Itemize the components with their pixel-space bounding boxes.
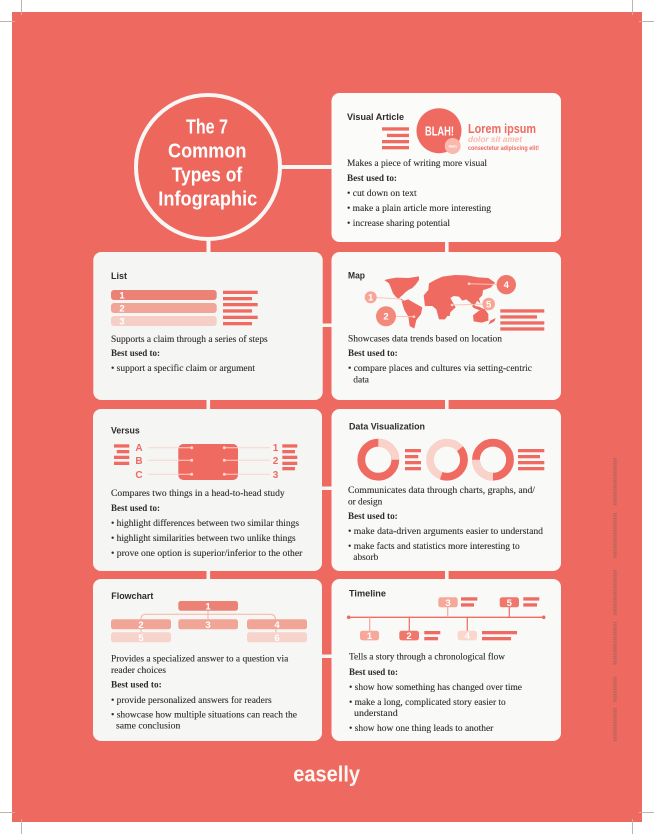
body text: flowchart: same conclusion	[116, 721, 180, 732]
title circle: Infographic	[158, 187, 257, 210]
numbered bars	[111, 290, 217, 328]
comparison diagram: 3	[273, 470, 279, 481]
body text: versus: • highlight similarities between two unlike things	[111, 533, 296, 544]
body text: visual article: • increase sharing potential	[347, 218, 450, 229]
body text: data visualization: absorb	[353, 552, 378, 563]
timeline diagram: 3	[445, 598, 451, 609]
icon: text lines	[223, 291, 258, 325]
connector lines	[206, 165, 449, 658]
body text: visual article: Makes a piece of writing more visual	[347, 158, 487, 169]
flow diagram: 1	[205, 601, 211, 612]
comparison diagram: 1	[273, 443, 279, 454]
body text: timeline: • make a long, complicated story easier to	[349, 697, 506, 708]
body text: data visualization: • make facts and statistics more interesting to	[348, 541, 520, 552]
body text: data visualization	[348, 485, 543, 563]
body text: timeline: Best used to:	[349, 667, 398, 678]
body text: data visualization: Communicates data through charts, graphs, and/	[348, 485, 535, 496]
body text: versus	[111, 488, 303, 559]
map callouts	[365, 275, 516, 326]
timeline diagram: 4	[465, 631, 471, 642]
panel: visual article	[332, 93, 561, 242]
body text: visual article: • make a plain article more interesting	[347, 203, 491, 214]
heading: flowchart: Flowchart	[111, 591, 154, 602]
flow diagram: 6	[274, 633, 280, 644]
timeline diagram: 5	[507, 598, 513, 609]
heading: timeline: Timeline	[349, 588, 386, 599]
body text: visual article	[347, 158, 491, 229]
icon: right text lines	[282, 444, 297, 470]
body text: timeline: Tells a story through a chronological flow	[349, 652, 506, 663]
body text: map: Best used to:	[348, 348, 398, 359]
numbered bars: 3	[119, 316, 125, 328]
donut chart 2	[430, 443, 464, 477]
icon: text lines	[382, 127, 409, 149]
body text: timeline	[349, 652, 523, 734]
illegible vertical credit line	[613, 458, 617, 742]
comparison diagram: C	[135, 470, 143, 481]
body text: versus: Compares two things in a head-to-head study	[111, 488, 285, 499]
title circle: Types of	[172, 164, 242, 187]
icon: text lines	[500, 309, 544, 331]
title circle: Common	[168, 139, 246, 162]
comparison diagram: A	[135, 443, 143, 454]
panel: list	[93, 252, 323, 400]
sample lorem text	[468, 122, 539, 152]
body text: map	[348, 334, 533, 386]
body text: flowchart: • showcase how multiple situations can reach the	[111, 710, 298, 721]
body text: versus: Best used to:	[111, 503, 160, 514]
body text: versus: • prove one option is superior/inferior to the other	[111, 548, 303, 559]
heading: visual article: Visual Article	[347, 112, 404, 123]
body text: data visualization: • make data-driven arguments easier to understand	[348, 526, 543, 537]
body text: flowchart	[111, 654, 298, 732]
numbered bars: 2	[119, 304, 125, 314]
comparison diagram: 2	[273, 456, 279, 467]
sample lorem text: Lorem ipsum	[468, 122, 536, 136]
flow diagram	[111, 601, 307, 644]
timeline diagram: 2	[406, 631, 412, 642]
comparison diagram: B	[135, 456, 143, 467]
comparison diagram	[135, 443, 279, 481]
body text: flowchart: reader choices	[111, 665, 166, 676]
map callouts: 2	[383, 312, 389, 323]
icon: left text lines	[114, 444, 129, 465]
body text: timeline: • show how something has changed over time	[349, 682, 523, 693]
timeline diagram	[347, 597, 546, 642]
body text: list: • support a specific claim or argument	[111, 363, 255, 374]
timeline diagram: 1	[367, 631, 373, 642]
panel: flowchart	[93, 579, 322, 741]
icon: right text lines	[518, 449, 544, 470]
easelly logo: easelly	[293, 762, 361, 787]
panel: timeline	[332, 579, 561, 741]
heading: list: List	[111, 271, 128, 282]
title circle: The 7	[186, 115, 228, 138]
map callouts: 4	[504, 280, 510, 291]
body text: map: • compare places and cultures via setting-centric	[348, 363, 533, 374]
icon: blah bubble: BLAH!	[425, 123, 454, 138]
map callouts: 1	[368, 293, 374, 304]
body text: list	[111, 334, 268, 374]
numbered bars: 1	[119, 290, 125, 302]
sample lorem text: consectetur adipiscing elit!	[468, 145, 539, 152]
body text: versus: • highlight differences between two similar things	[111, 518, 299, 529]
heading: versus: Versus	[111, 426, 140, 437]
panel: versus	[93, 409, 322, 571]
body text: list: Best used to:	[111, 348, 160, 359]
body text: visual article: • cut down on text	[347, 188, 417, 199]
body text: map: data	[353, 375, 370, 386]
icon: blah bubble: blah	[449, 144, 457, 148]
icon: middle text lines	[405, 449, 421, 470]
body text: flowchart: • provide personalized answers for readers	[111, 695, 272, 706]
body text: map: Showcases data trends based on location	[348, 334, 502, 345]
donut chart 1	[361, 443, 395, 477]
body text: list: Supports a claim through a series of steps	[111, 334, 268, 345]
body text: flowchart: Provides a specialized answer to a question via	[111, 654, 289, 665]
flow diagram: 3	[205, 620, 211, 631]
panel: data visualization	[332, 409, 561, 571]
title circle	[136, 95, 280, 239]
heading: data visualization: Data Visualization	[349, 422, 425, 433]
body text: timeline: understand	[354, 708, 398, 719]
body text: flowchart: Best used to:	[111, 680, 162, 691]
body text: timeline: • show how one thing leads to another	[349, 723, 494, 734]
body text: visual article: Best used to:	[347, 173, 397, 184]
icon: blah bubble	[416, 108, 462, 154]
panel: map	[332, 252, 561, 400]
heading: map: Map	[348, 271, 365, 282]
map callouts: 5	[486, 300, 492, 310]
flow diagram: 2	[138, 620, 144, 631]
body text: data visualization: or design	[348, 496, 382, 507]
flow diagram: 5	[138, 633, 144, 644]
sample lorem text: dolor sit amet	[468, 135, 522, 144]
body text: data visualization: Best used to:	[348, 511, 398, 522]
donut chart 3	[476, 443, 510, 477]
flow diagram: 4	[274, 620, 280, 631]
world map	[384, 275, 496, 329]
